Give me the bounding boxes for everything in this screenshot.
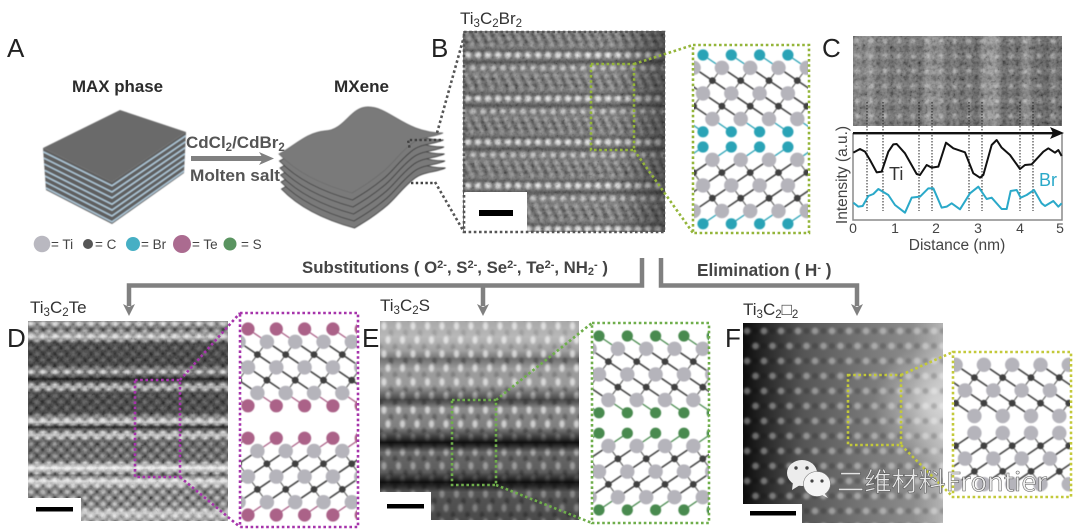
legend: atom types	[34, 235, 262, 253]
panel D: Ti3C2Te	[9, 301, 360, 528]
TEM image C	[853, 36, 1062, 126]
curve label Ti: Ti	[889, 164, 903, 184]
heading: Substitutions: 2-	[545, 259, 555, 271]
watermark: account name: 二维材料Frontier	[837, 462, 1048, 499]
heading: Substitutions: , NH	[554, 258, 588, 277]
legend: atom types: = Br	[141, 237, 167, 252]
label A: A	[7, 33, 25, 63]
panel A: synthesis schematic	[7, 33, 446, 253]
x axis ticks: 0	[849, 220, 857, 236]
reaction label: CdCl2/CdBr2: CdCl	[186, 133, 226, 152]
TEM image E	[380, 321, 579, 520]
panel F: Ti3C2 vacancy	[725, 300, 1080, 529]
branch arrow: elimination	[661, 258, 863, 316]
selection box and callout lines B	[591, 45, 693, 233]
x axis ticks: 2	[932, 220, 940, 236]
label F: F	[725, 323, 741, 353]
heading: Elimination: -	[817, 262, 821, 274]
atomic model F	[952, 350, 1072, 498]
title Ti3C2Br2: 3	[474, 18, 480, 30]
title Ti3C2 with vacancy: 2	[792, 309, 798, 321]
reaction arrow	[191, 152, 274, 165]
title Ti3C2Te: Ti	[30, 298, 44, 317]
reaction label: CdCl2/CdBr2: /CdBr	[232, 133, 279, 152]
x axis ticks: 1	[891, 220, 899, 236]
heading: Substitutions: 2-	[467, 259, 478, 271]
MAX phase layered block	[43, 110, 186, 224]
x axis ticks: 3	[974, 220, 982, 236]
x axis ticks: 5	[1056, 220, 1064, 236]
selection box and callout lines F	[848, 352, 953, 497]
title Ti3C2Br2: 2	[516, 18, 522, 30]
heading: MAX phase: MAX phase	[72, 77, 163, 96]
heading: Elimination: )	[821, 260, 831, 280]
heading: Substitutions: , Te	[517, 258, 545, 277]
scale bar box E	[380, 492, 431, 521]
heading: Substitutions: )	[598, 258, 608, 277]
legend: atom types: = S	[241, 237, 262, 252]
plot axes	[853, 133, 1062, 220]
title Ti3C2Br2: 2	[492, 18, 499, 30]
x axis ticks	[849, 220, 1064, 236]
title Ti3C2Te: 3	[44, 307, 50, 319]
title Ti3C2Br2: Ti	[460, 9, 474, 28]
title Ti3C2S: 2	[412, 305, 419, 317]
title Ti3C2Te: Te	[69, 298, 87, 317]
Br intensity curve	[853, 187, 1062, 213]
legend: atom types: = Ti	[51, 237, 73, 252]
title Ti3C2 with vacancy: C	[763, 300, 775, 319]
heading: Substitutions: 2-	[507, 259, 517, 271]
selection box and callout lines E	[452, 323, 592, 523]
branch arrows: substitution	[123, 258, 642, 316]
title Ti3C2Br2: C	[480, 9, 492, 28]
title Ti3C2 with vacancy: □	[782, 300, 792, 319]
dotted guide lines	[867, 102, 1033, 211]
title Ti3C2Te: 2	[62, 307, 69, 319]
x axis label: Distance (nm)	[909, 237, 1005, 254]
heading: MXene: MXene	[334, 77, 389, 96]
heading: Substitutions: , S	[447, 258, 467, 277]
reaction label: CdCl2/CdBr2: 2	[278, 142, 285, 154]
TEM image F	[743, 323, 943, 523]
title Ti3C2 with vacancy: 3	[757, 309, 763, 321]
selection box and callout lines D	[135, 313, 240, 527]
title Ti3C2S: 3	[394, 305, 400, 317]
title Ti3C2 with vacancy: 2	[775, 309, 782, 321]
heading: Substitutions: -	[594, 259, 598, 271]
x axis ticks: 4	[1016, 220, 1024, 236]
atomic model E	[590, 322, 710, 524]
scale bar box D	[28, 498, 81, 521]
y axis label: Intensity (a.u.)	[834, 126, 851, 224]
title Ti3C2S: S	[419, 296, 430, 315]
title Ti3C2Te: C	[50, 298, 62, 317]
legend: atom types: = Te	[192, 237, 218, 252]
curve label Br: Br	[1039, 170, 1057, 190]
title Ti3C2Br2: Br	[499, 9, 516, 28]
TEM image D	[28, 321, 228, 521]
heading: Substitutions: 2	[588, 266, 594, 278]
label C: C	[822, 33, 841, 63]
atomic model B	[692, 44, 810, 234]
label E: E	[362, 323, 379, 353]
MXene wavy stack	[279, 107, 446, 228]
heading: Elimination: Elimination ( H	[697, 260, 817, 280]
panel B: Ti3C2Br2	[433, 12, 810, 234]
label D: D	[7, 323, 26, 353]
scale bar box F	[743, 504, 802, 523]
dotted callout lines from MXene to panel B	[435, 33, 465, 232]
title Ti3C2S: Ti	[380, 296, 394, 315]
heading: Substitutions: 2-	[437, 259, 447, 271]
heading: Substitutions: Substitutions ( O	[302, 258, 437, 277]
zoom region dotted box on MXene	[408, 140, 441, 183]
title Ti3C2S: C	[400, 296, 412, 315]
panel C: intensity profile	[822, 33, 1064, 254]
TEM image B	[463, 31, 665, 232]
image border B	[464, 32, 664, 232]
label B: B	[431, 33, 448, 63]
title Ti3C2 with vacancy: Ti	[743, 300, 757, 319]
atomic model D	[238, 312, 360, 528]
reaction label: Molten salt: Molten salt	[190, 166, 280, 185]
reaction label: CdCl2/CdBr2: 2	[226, 142, 232, 154]
scale bar box B	[464, 192, 527, 232]
scan arrow	[853, 127, 1064, 139]
watermark: WeChat icon	[787, 460, 830, 498]
Ti intensity curve	[853, 140, 1062, 178]
heading: Substitutions: , Se	[477, 258, 507, 277]
legend: atom types: = C	[95, 237, 117, 252]
panel E: Ti3C2S	[364, 299, 710, 524]
